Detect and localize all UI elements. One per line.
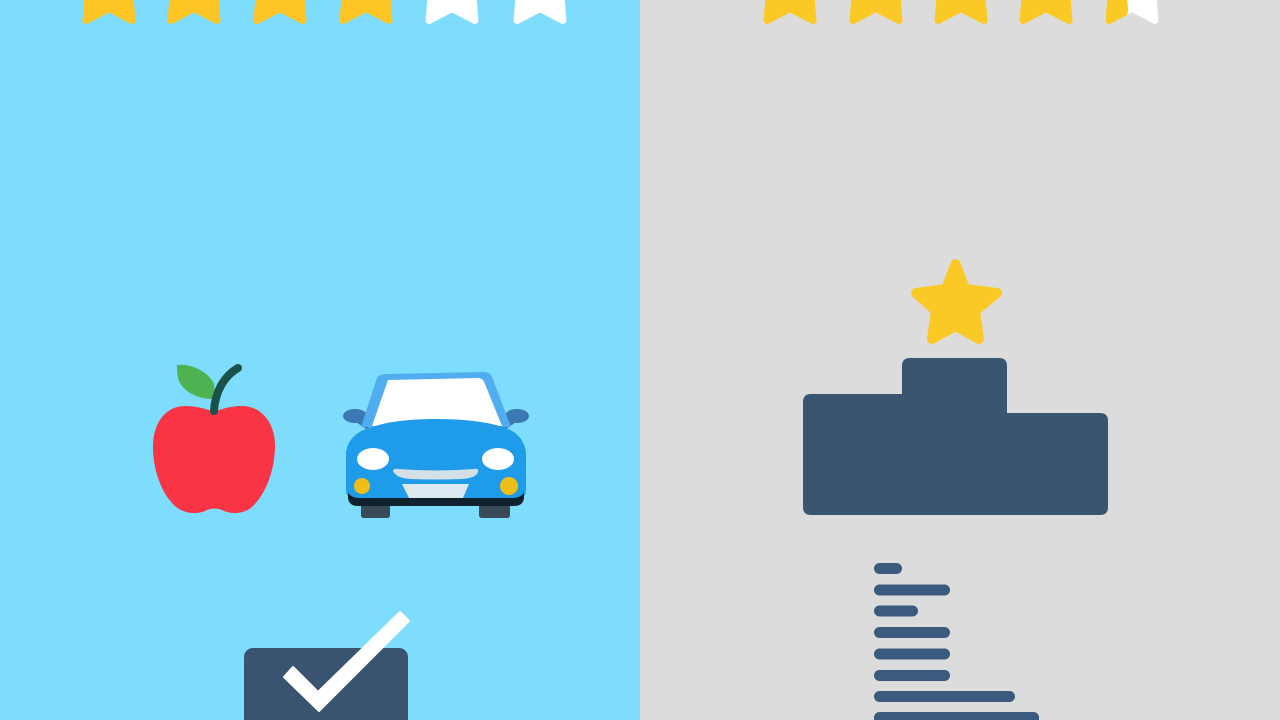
grille	[393, 469, 478, 480]
icon: star above podium	[916, 264, 997, 339]
rating stars: four and a half filled	[767, 0, 1155, 20]
panel: left blue	[0, 0, 640, 720]
bar list	[874, 563, 1039, 720]
rating stars: four of six filled	[86, 0, 563, 20]
apple stem	[214, 368, 238, 411]
bumper	[348, 493, 524, 506]
icon: checkbox with tick	[244, 612, 409, 720]
icon: podium	[803, 358, 1108, 515]
car roof	[361, 372, 511, 427]
number plate	[402, 484, 469, 498]
headlights	[357, 448, 514, 470]
icon: red apple	[153, 365, 275, 513]
fog lamps	[354, 477, 518, 495]
apple leaf	[177, 365, 214, 399]
panel: right grey	[764, 0, 1158, 720]
car body	[346, 419, 526, 498]
car windshield	[372, 378, 502, 426]
tick mark	[284, 612, 409, 711]
car mirrors	[343, 409, 529, 429]
icon: blue car front view	[343, 372, 529, 518]
wheels	[361, 506, 510, 518]
